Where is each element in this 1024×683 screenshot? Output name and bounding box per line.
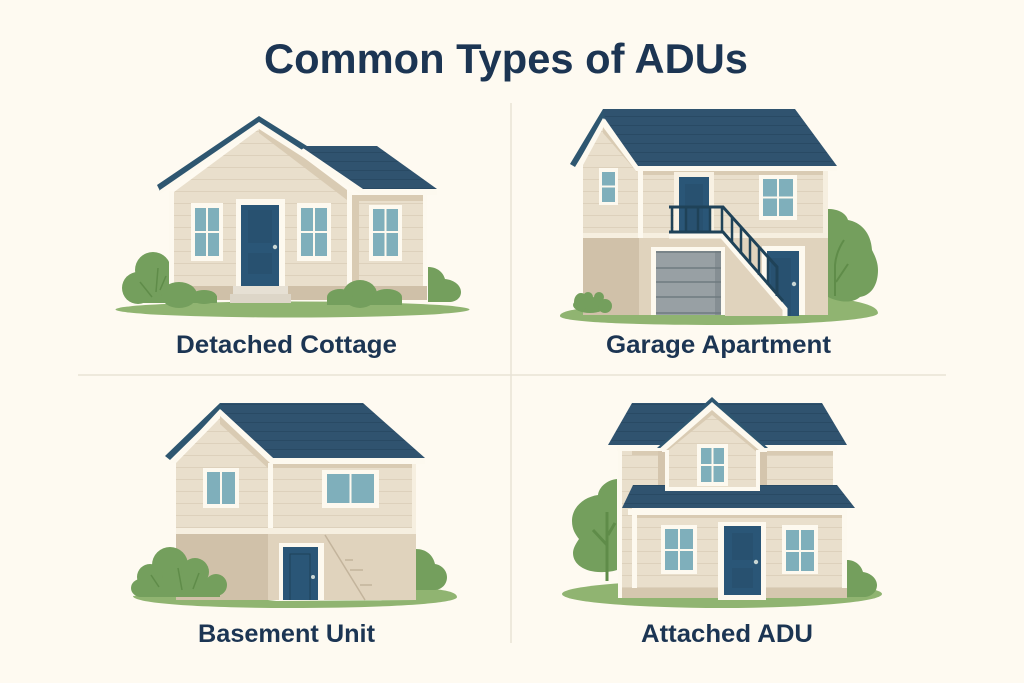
roof bbox=[157, 116, 437, 195]
garage door bbox=[651, 247, 725, 315]
tree bbox=[572, 479, 617, 581]
panel: detached cottage bbox=[116, 116, 470, 318]
window bbox=[297, 203, 331, 261]
label: garage apartment: Garage Apartment bbox=[606, 331, 832, 359]
bushes front bbox=[161, 267, 461, 308]
window bbox=[369, 205, 402, 261]
bush bbox=[847, 560, 877, 597]
window bbox=[599, 168, 618, 205]
ground bbox=[133, 589, 457, 608]
house walls bbox=[618, 451, 847, 598]
label: basement unit: Basement Unit bbox=[198, 620, 376, 648]
window bbox=[759, 175, 797, 220]
ground bbox=[116, 302, 470, 318]
ground bbox=[562, 580, 882, 608]
door bbox=[236, 199, 285, 286]
door bbox=[279, 543, 324, 600]
bush left bbox=[131, 547, 227, 597]
door bbox=[718, 522, 766, 600]
stair wedge bbox=[725, 238, 787, 316]
balcony and stair railing bbox=[669, 207, 785, 316]
upper roof bbox=[608, 403, 847, 451]
bush bbox=[573, 292, 612, 313]
title: Common Types of ADUs bbox=[264, 35, 748, 82]
panel: attached adu bbox=[562, 397, 882, 608]
label: attached adu: Attached ADU bbox=[641, 620, 813, 648]
steps bbox=[230, 286, 291, 303]
bush behind left bbox=[122, 252, 171, 304]
house walls bbox=[583, 124, 828, 315]
exterior stair lines bbox=[325, 535, 372, 600]
house walls bbox=[176, 412, 416, 600]
lower roof bbox=[622, 485, 855, 515]
roof bbox=[570, 109, 837, 171]
bush right bbox=[416, 549, 447, 590]
window bbox=[203, 468, 239, 508]
panel: garage apartment bbox=[560, 109, 878, 325]
panel: basement unit bbox=[131, 403, 457, 608]
window bbox=[322, 470, 379, 508]
window bbox=[782, 525, 818, 574]
lower door bbox=[762, 246, 805, 316]
roof bbox=[165, 403, 425, 464]
window bbox=[661, 525, 697, 574]
dormer bbox=[657, 397, 768, 490]
window bbox=[191, 203, 223, 261]
house walls bbox=[169, 124, 427, 300]
tree bbox=[828, 209, 878, 302]
label: detached cottage: Detached Cottage bbox=[176, 331, 397, 359]
upper door bbox=[674, 172, 714, 233]
ground bbox=[560, 297, 878, 325]
